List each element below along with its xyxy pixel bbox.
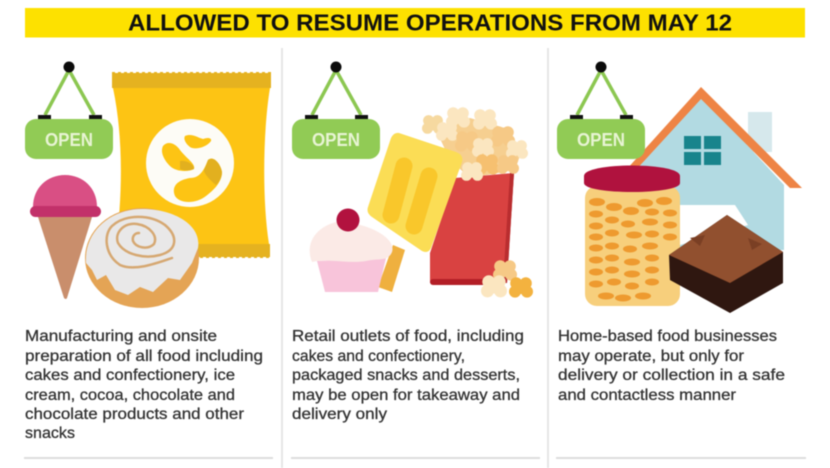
text: manufacturing description: preparation of all food including: [25, 348, 263, 365]
icon: popcorn: [422, 107, 528, 181]
title banner: [25, 8, 805, 38]
icon: cinnamon bun: [85, 208, 199, 308]
icon: open sign: OPEN: [45, 130, 93, 150]
icon: cupcake: [310, 208, 393, 292]
text: manufacturing description: cream, cocoa, chocolate and: [25, 387, 235, 404]
text: home-based description: may operate, but only for: [558, 348, 745, 365]
text: retail description: Retail outlets of food, including: [292, 328, 524, 345]
icon: popcorn bucket: [430, 173, 514, 285]
text: manufacturing description: snacks: [25, 425, 75, 442]
icon: chips bag: [112, 73, 271, 257]
icon: open sign: OPEN: [577, 130, 625, 150]
panel: home-based: [557, 62, 802, 313]
panel: retail: [292, 62, 533, 298]
icon: brownie: [669, 215, 783, 313]
text: manufacturing description: cakes and confectionery, ice: [25, 367, 235, 384]
text: retail description: [292, 328, 524, 423]
icon: open sign: [292, 62, 380, 159]
icon: open sign: OPEN: [312, 130, 360, 150]
icon: ice cream cone: [30, 175, 101, 299]
text: manufacturing description: Manufacturing and onsite: [25, 328, 217, 345]
text: home-based description: Home-based food businesses: [558, 328, 777, 345]
text: home-based description: delivery or collection in a safe: [558, 367, 785, 384]
title banner: ALLOWED TO RESUME OPERATIONS FROM MAY 12: [128, 10, 732, 36]
icon: open sign: [25, 62, 113, 159]
icon: cookie jar: [584, 166, 680, 306]
text: retail description: delivery only: [292, 406, 387, 423]
icon: house: [626, 87, 802, 250]
text: retail description: packaged snacks and desserts,: [292, 367, 520, 384]
text: home-based description: [558, 328, 785, 404]
icon: open sign: [557, 62, 645, 159]
text: retail description: cakes and confectionery,: [292, 348, 465, 365]
panel: manufacturing: [25, 62, 271, 308]
text: manufacturing description: chocolate products and other: [25, 406, 245, 423]
text: home-based description: and contactless manner: [558, 387, 737, 404]
text: retail description: may be open for takeaway and: [292, 387, 520, 404]
text: manufacturing description: [25, 328, 263, 442]
icon: loose popcorn: [481, 260, 533, 298]
icon: popsicle: [368, 133, 462, 292]
